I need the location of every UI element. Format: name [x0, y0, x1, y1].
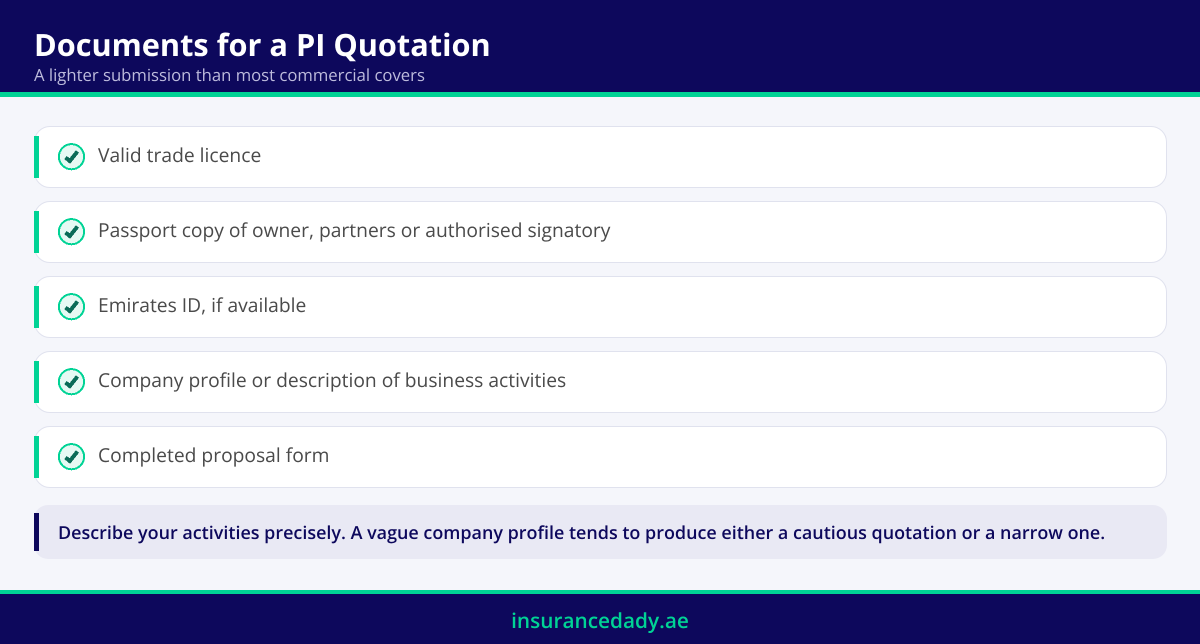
footer website: insurancedady.ae	[511, 607, 689, 635]
footer banner	[0, 590, 1200, 644]
checklist item: company profile	[34, 351, 1167, 413]
subtitle: A lighter submission than most commercial covers	[34, 63, 425, 86]
checklist item: passport copy	[34, 201, 1167, 263]
item text: Company profile or description of business activities	[98, 366, 566, 393]
item text: Passport copy of owner, partners or authorised signatory	[98, 216, 610, 243]
icon: check	[58, 443, 85, 470]
icon: check	[58, 143, 85, 170]
item text: Valid trade licence	[98, 141, 261, 168]
checklist item: Emirates ID	[34, 276, 1167, 338]
icon: check	[58, 293, 85, 320]
title: Documents for a PI Quotation	[34, 23, 491, 65]
item text: Completed proposal form	[98, 441, 329, 468]
callout note	[34, 505, 1167, 559]
icon: check	[58, 368, 85, 396]
item text: Emirates ID, if available	[98, 291, 306, 318]
header banner	[0, 0, 1200, 97]
icon: check	[58, 218, 85, 246]
callout note: Describe your activities precisely. A vague company profile tends to produce either a cautious quotation or a narrow one.	[58, 521, 1105, 545]
checklist item: proposal form	[34, 426, 1167, 488]
checklist item: trade licence	[34, 126, 1167, 188]
